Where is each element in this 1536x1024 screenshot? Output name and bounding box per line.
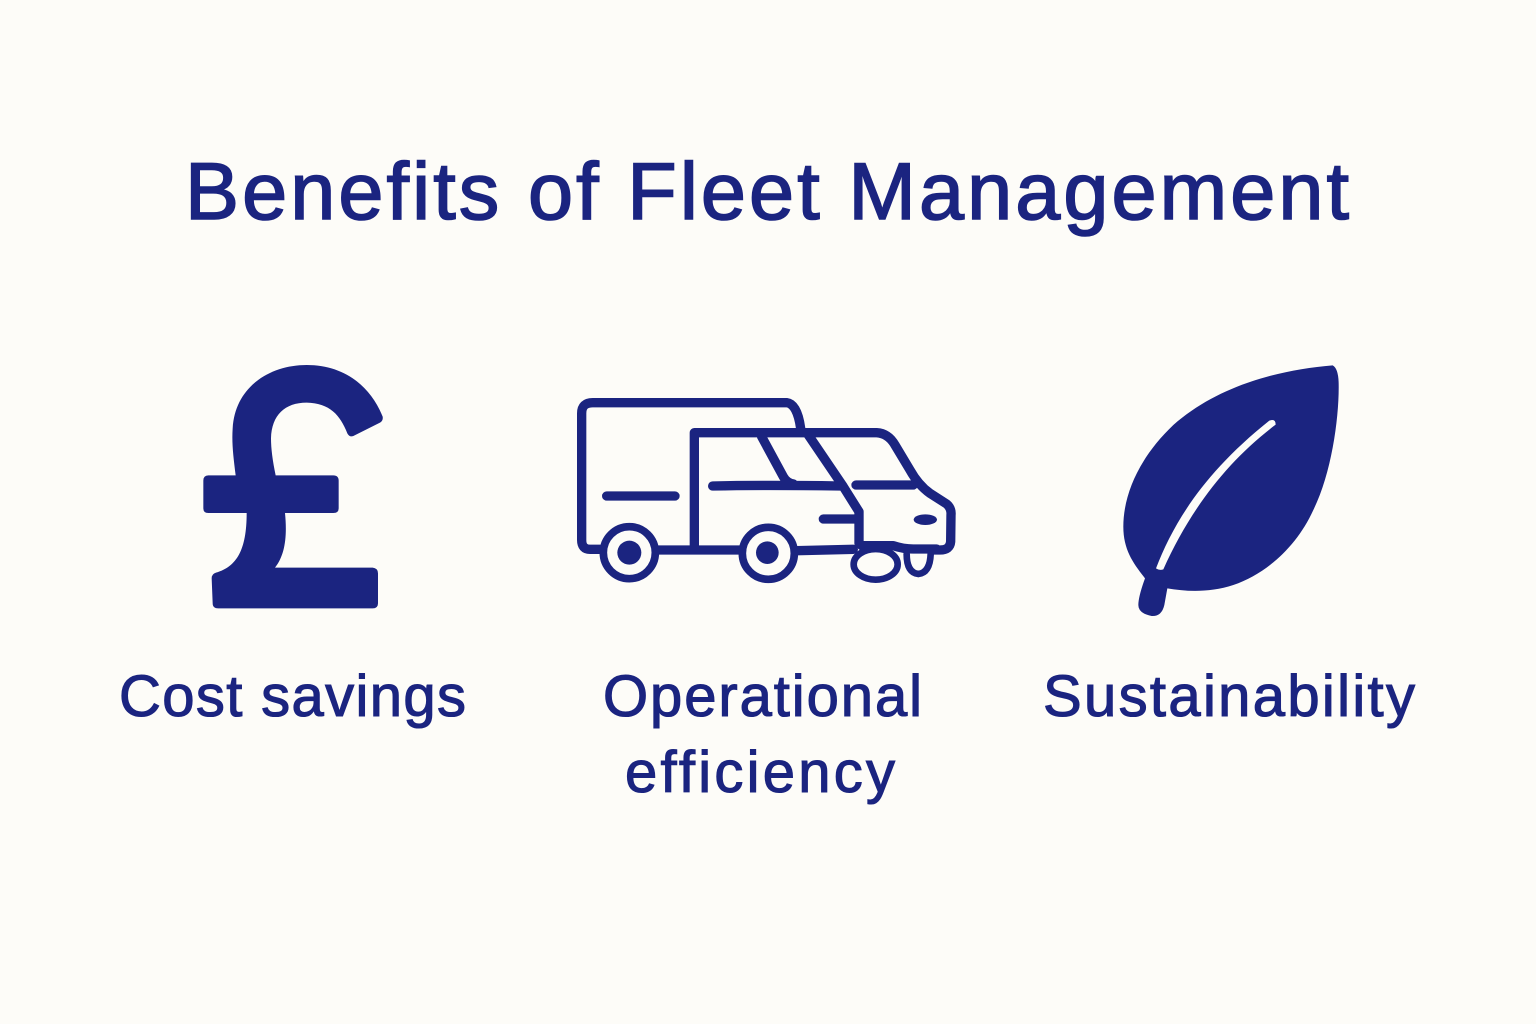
rear van body (582, 403, 801, 549)
label: sustainability: Sustainability (1043, 664, 1415, 729)
window and trim lines (607, 437, 913, 519)
label: cost savings: Cost savings (119, 664, 466, 729)
label: operational efficiency (603, 664, 922, 805)
rear van wheel (603, 527, 655, 579)
front wheels (854, 549, 931, 580)
icon: pound sign (203, 365, 383, 608)
front van outline (657, 433, 951, 551)
label: operational efficiency: Operational (603, 664, 922, 729)
label: operational efficiency: efficiency (625, 740, 895, 805)
headlight (914, 514, 937, 525)
title: Benefits of Fleet Management (185, 147, 1349, 237)
icon: leaf (1123, 365, 1339, 616)
icon: delivery vans (582, 403, 951, 580)
middle wheel (742, 527, 794, 579)
